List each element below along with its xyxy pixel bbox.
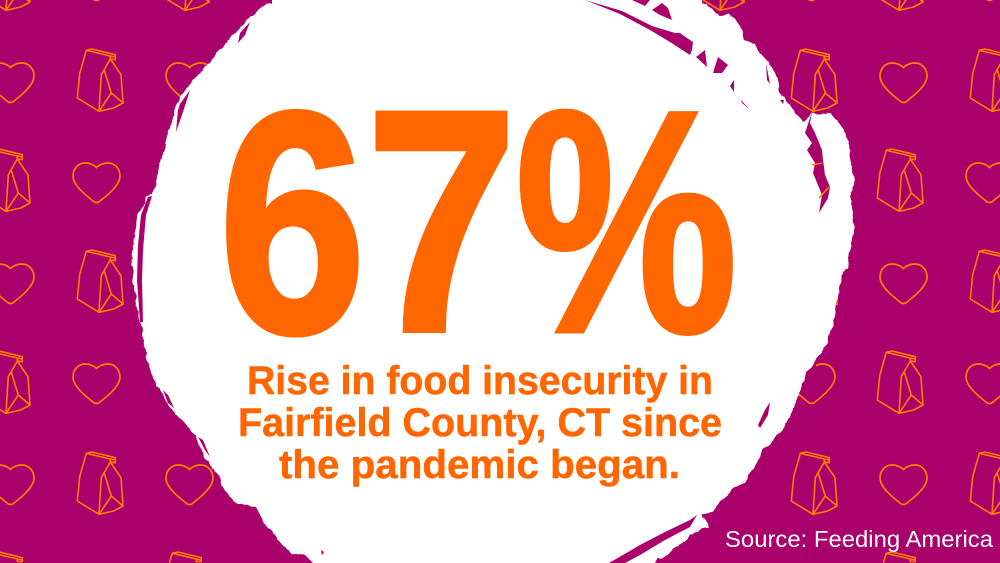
caption line 2: Fairfield County, CT since (238, 401, 722, 445)
source note: Source: Feeding America (725, 526, 993, 552)
big number 67% (218, 45, 737, 399)
caption line 1: Rise in food insecurity in (247, 359, 713, 403)
caption (238, 359, 722, 487)
white brush-stroke circle (132, 0, 855, 563)
digit 7: 7 (366, 45, 517, 398)
caption line 3: the pandemic began. (279, 443, 680, 487)
percent sign: % (516, 46, 737, 399)
digit 6: 6 (218, 46, 366, 399)
